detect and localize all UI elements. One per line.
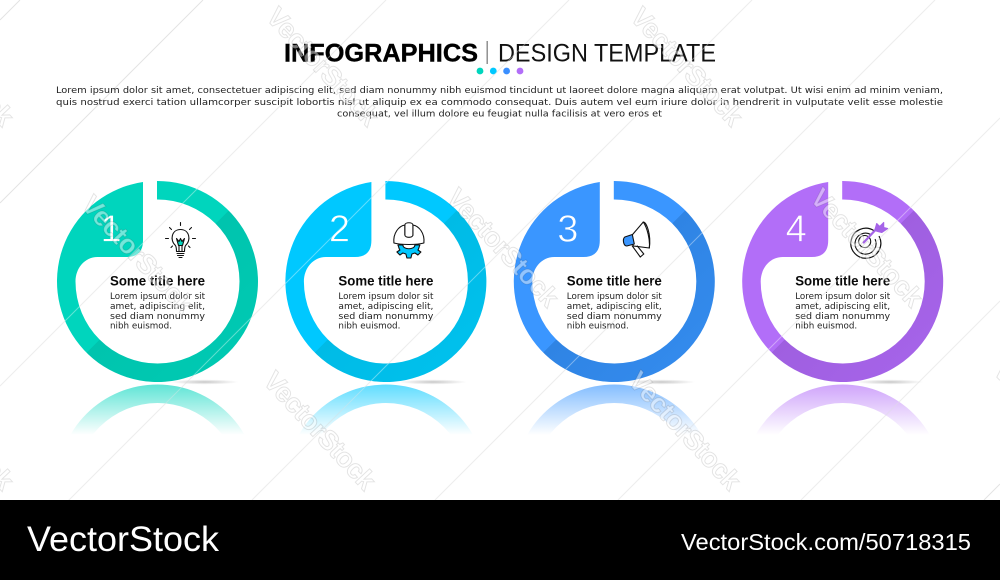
number 1: 1 <box>100 208 122 250</box>
intro paragraph: Lorem ipsum dolor sit amet, consectetuer adipiscing elit, sed diam nonummy nibh euismod tincidunt ut laoreet dolore magna aliquam erat volutpat. Ut wisi enim ad minim veniam, <box>56 86 943 96</box>
card text 4: nibh euismod. <box>795 322 857 332</box>
card text 4 <box>795 292 891 332</box>
watermark text: VectorStock <box>76 190 201 321</box>
panel: step 1 <box>57 181 258 580</box>
card text 3: sed diam nonummy <box>567 312 662 322</box>
card text 1: nibh euismod. <box>110 322 172 332</box>
intro paragraph: consequat, vel illum dolore eu feugiat nulla facilisis at vero eros et <box>337 110 663 120</box>
watermark text: VectorStock <box>805 183 930 314</box>
title: INFOGRAPHICS <box>284 40 478 68</box>
card text 1: Lorem ipsum dolor sit <box>110 292 206 302</box>
card text 4: sed diam nonummy <box>795 312 890 322</box>
shadow 1 <box>170 380 238 384</box>
title dots <box>477 68 523 74</box>
panel: step 3 <box>514 181 715 580</box>
card text 4: amet, adipiscing elit, <box>795 302 890 312</box>
number 3: 3 <box>557 208 578 250</box>
reflection 1 <box>57 384 258 580</box>
panel: step 4 <box>742 181 943 580</box>
ring 2 <box>285 181 486 382</box>
card text 3 <box>567 292 662 332</box>
title <box>284 40 716 68</box>
shadow 3 <box>627 380 695 384</box>
number 4: 4 <box>786 208 807 250</box>
card text 2: amet, adipiscing elit, <box>338 302 433 312</box>
watermark text: VectorStock <box>623 366 748 497</box>
card text 2: Lorem ipsum dolor sit <box>338 292 434 302</box>
ring 4 <box>742 181 943 382</box>
watermark text: VectorStock <box>625 2 750 133</box>
ring 1 <box>57 181 258 382</box>
reflection 4 <box>742 384 943 580</box>
intro paragraph <box>56 86 943 120</box>
icon: target and arrow <box>851 222 888 258</box>
card title 4: Some title here <box>795 274 891 288</box>
shadow 2 <box>399 380 467 384</box>
card text 2: nibh euismod. <box>338 322 400 332</box>
watermark text: VectorStock <box>261 2 386 133</box>
card text 4: Lorem ipsum dolor sit <box>795 292 891 302</box>
footer bar <box>0 500 1000 580</box>
card text 3: nibh euismod. <box>567 322 629 332</box>
icon: light bulb <box>166 222 196 258</box>
reflection 2 <box>285 384 486 580</box>
card text 1: amet, adipiscing elit, <box>110 302 205 312</box>
card text 1: sed diam nonummy <box>110 312 205 322</box>
card text 2: sed diam nonummy <box>338 312 433 322</box>
footer logo: VectorStock <box>27 520 220 559</box>
footer url: VectorStock.com/50718315 <box>681 529 971 555</box>
shadow 4 <box>856 380 924 384</box>
card text 2 <box>338 292 434 332</box>
card title 2: Some title here <box>338 274 434 288</box>
card text 3: amet, adipiscing elit, <box>567 302 662 312</box>
intro paragraph: quis nostrud exerci tation ullamcorper suscipit lobortis nisl ut aliquip ex ea commodo consequat. Duis autem vel eum iriure dolor in hendrerit in vulputate velit esse molestie <box>56 98 943 108</box>
icon: helmet and gear <box>394 223 424 258</box>
card text 3: Lorem ipsum dolor sit <box>567 292 662 302</box>
icon: megaphone <box>623 222 650 257</box>
panel: step 2 <box>285 181 486 580</box>
card title 1: Some title here <box>110 274 205 288</box>
reflection 3 <box>514 384 715 580</box>
watermark text: VectorStock <box>258 366 383 497</box>
card title 3: Some title here <box>567 274 662 288</box>
title: DESIGN TEMPLATE <box>498 40 716 68</box>
ring 3 <box>514 181 715 382</box>
watermark text: VectorStock <box>441 183 566 314</box>
number 2: 2 <box>329 208 350 250</box>
card text 1 <box>110 292 206 332</box>
